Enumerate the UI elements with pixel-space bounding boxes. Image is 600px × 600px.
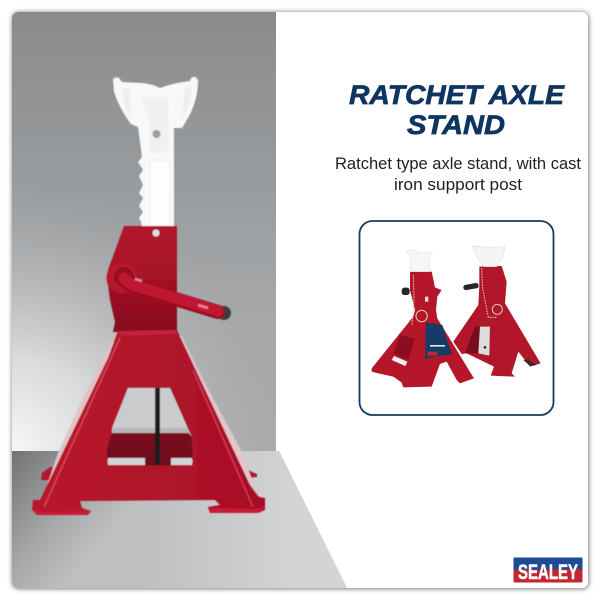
- logo: Sealey: SEALEY: [518, 561, 578, 584]
- logo: Sealey: [514, 558, 582, 584]
- red post body: [107, 226, 177, 332]
- view through window: [107, 388, 193, 466]
- description text: Ratchet type axle stand, with cast: [335, 155, 581, 173]
- A-frame outer side band: [42, 335, 258, 503]
- top hole: [152, 229, 160, 237]
- wall backdrop: [12, 12, 276, 452]
- white ratchet post: [113, 77, 198, 226]
- description text: [335, 155, 581, 194]
- rear stand: [453, 246, 541, 377]
- panel: inset photo of pair of stands: [360, 221, 554, 415]
- large axle stand photo: [32, 77, 265, 515]
- title: STAND: [407, 110, 505, 140]
- handle: [106, 262, 231, 320]
- rear feet: [41, 467, 257, 480]
- description text: iron support post: [394, 176, 522, 194]
- title: RATCHET AXLE: [349, 80, 565, 110]
- title: [349, 80, 565, 140]
- A-frame base: [32, 330, 265, 515]
- post hole: [152, 130, 160, 138]
- front stand: [372, 250, 474, 387]
- leg highlights: [44, 338, 120, 507]
- floor: [12, 451, 347, 588]
